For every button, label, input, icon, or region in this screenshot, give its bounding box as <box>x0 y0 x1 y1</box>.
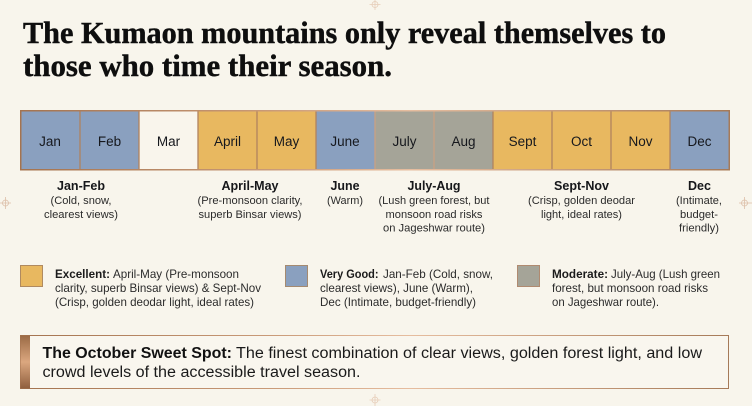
swatch: Very Good <box>286 266 308 286</box>
caption: July-Aug: monsoon road risks <box>386 209 483 221</box>
caption: April-May <box>198 179 302 221</box>
month: Nov <box>611 111 670 170</box>
title <box>23 15 666 83</box>
caption: Dec: friendly) <box>679 222 719 234</box>
month: Oct <box>552 111 611 170</box>
legend: Moderate: on Jageshwar route). <box>552 295 659 309</box>
caption: Jan-Feb: (Cold, snow, <box>50 195 112 207</box>
month: Oct: Oct <box>571 134 592 149</box>
month: April: April <box>214 134 241 149</box>
legend: Moderate: July-Aug (Lush green <box>611 267 720 281</box>
caption: April-May: April-May <box>222 179 279 193</box>
month: Nov: Nov <box>628 134 653 149</box>
callout: The October Sweet Spot: crowd levels of the accessible travel season. <box>42 364 360 381</box>
legend: Moderate <box>518 266 720 309</box>
month: May <box>257 111 316 170</box>
month: Mar: Mar <box>157 134 181 149</box>
caption: June <box>327 179 363 207</box>
decorative crosshair: bottom <box>370 394 380 406</box>
decorative crosshair: right <box>739 197 752 209</box>
caption: Dec: (Intimate, <box>676 195 722 207</box>
decorative crosshair: left <box>0 197 11 209</box>
legend: Very Good: clearest views), June (Warm), <box>320 281 473 295</box>
caption: Jan-Feb <box>44 179 118 221</box>
legend: Excellent: (Crisp, golden deodar light, ideal rates) <box>55 295 254 309</box>
month: June: June <box>330 134 360 149</box>
caption: July-Aug: on Jageshwar route) <box>383 222 485 234</box>
month: May: May <box>274 134 299 149</box>
caption: July-Aug: July-Aug <box>408 179 460 193</box>
caption: July-Aug <box>378 179 490 234</box>
caption: Dec <box>676 179 722 234</box>
month: Jan <box>21 111 80 170</box>
month: April <box>198 111 257 170</box>
legend: Very Good: Dec (Intimate, budget-friendly) <box>320 295 476 309</box>
swatch: Excellent <box>20 266 42 286</box>
legend: Excellent: clarity, superb Binsar views) & Sept-Nov <box>55 281 261 295</box>
month: Mar <box>139 111 198 170</box>
legend: Excellent: April-May (Pre-monsoon <box>113 267 239 281</box>
legend: Moderate: forest, but monsoon road risks <box>552 281 708 295</box>
callout accent bar <box>20 336 30 388</box>
caption: Sept-Nov: (Crisp, golden deodar <box>528 195 635 207</box>
caption: July-Aug: (Lush green forest, but <box>378 195 490 207</box>
legend: Excellent: Excellent: <box>55 267 110 281</box>
calendar strip of months <box>21 111 729 170</box>
callout: The October Sweet Spot: The finest combination of clear views, golden forest light, and low <box>236 345 703 362</box>
caption: Dec: budget- <box>680 209 718 221</box>
legend: Moderate: Moderate: <box>552 267 608 281</box>
month: Aug <box>434 111 493 170</box>
legend: Very Good: Very Good: <box>320 267 378 281</box>
month: Sept: Sept <box>509 134 537 149</box>
title: The Kumaon mountains only reveal themselves to <box>23 15 666 50</box>
month: Aug: Aug <box>451 134 476 149</box>
caption: Sept-Nov: light, ideal rates) <box>541 209 622 221</box>
legend: Excellent <box>20 266 261 309</box>
month: Feb <box>80 111 139 170</box>
month: June <box>316 111 375 170</box>
title: those who time their season. <box>23 48 392 83</box>
month: Feb: Feb <box>98 134 121 149</box>
caption: Jan-Feb: clearest views) <box>44 209 118 221</box>
callout: The October Sweet Spot: The October Sweet Spot: <box>42 345 232 362</box>
caption: June: June <box>330 179 360 193</box>
month: July <box>375 111 434 170</box>
month: July: July <box>392 134 417 149</box>
legend: Very Good: Jan-Feb (Cold, snow, <box>383 267 493 281</box>
caption: Sept-Nov <box>528 179 635 221</box>
caption: Sept-Nov: Sept-Nov <box>554 179 609 193</box>
swatch: Moderate <box>518 266 540 286</box>
caption: April-May: superb Binsar views) <box>198 209 302 221</box>
caption: April-May: (Pre-monsoon clarity, <box>198 195 302 207</box>
caption: June: (Warm) <box>327 195 363 207</box>
month: Jan: Jan <box>39 134 61 149</box>
legend: Very Good <box>286 266 493 309</box>
month: Sept <box>493 111 552 170</box>
month: Dec: Dec <box>687 134 712 149</box>
month: Dec <box>670 111 729 170</box>
decorative crosshair: top <box>370 0 380 10</box>
caption: Dec: Dec <box>688 179 711 193</box>
caption: Jan-Feb: Jan-Feb <box>57 179 105 193</box>
callout: The October Sweet Spot <box>20 336 728 388</box>
